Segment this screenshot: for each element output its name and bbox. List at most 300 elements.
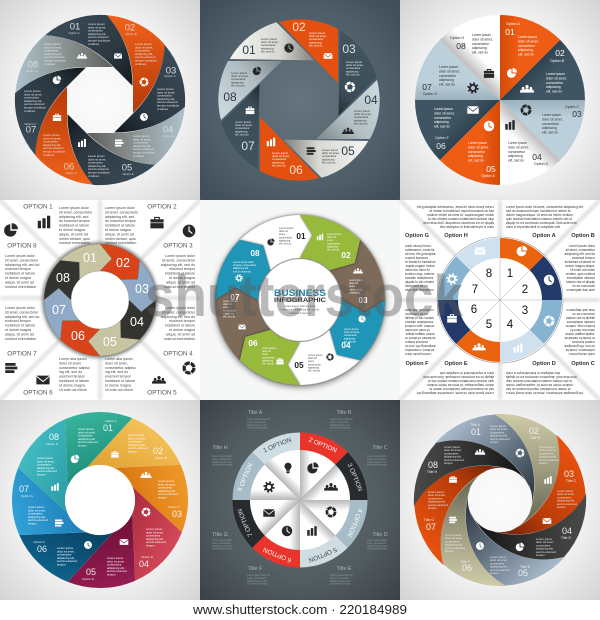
text 3: aliqua. Ut enim ad [166,280,195,284]
text 02: adipiscing elit, [135,52,153,56]
text C: Lorem ipsum [542,113,561,117]
text A: Lorem ipsum [518,35,537,39]
text B: dolor sit amet, [546,76,567,80]
panel: straight shutter ring on dark background [200,0,400,200]
numbers and option labels: Option H [450,36,464,40]
text 08: Lorem ipsum [44,42,61,46]
text 5: eiusmod tempor [105,375,132,379]
text H: adipiscing [472,46,487,50]
wedge H [440,0,542,100]
wedge 3 [300,452,381,534]
text 03: dolor sit amet, [346,63,364,67]
numbers: 02 [341,250,351,260]
numbers and option labels: Option D [534,162,548,166]
ring of eight straight blades [214,15,384,185]
text 5: et dolore magna [105,383,131,387]
option headings: OPTION 1 [23,204,53,210]
text 05: dolor sit [308,357,317,360]
left upper mirrored text: sit amet, consectetur [404,248,434,252]
ring option labels: 7 OPTION [236,507,254,538]
option headings: OPTION 8 [7,242,37,250]
numbers: 05 [294,360,304,370]
top right text: dolore magna aliqua. Ut enim ad minim veniam, [506,213,574,217]
panel: business infographic pentagon ring [197,197,403,403]
numbers and option labels: Option D [162,134,174,138]
numbers and titles: 08 [428,460,438,470]
text 02: dolor sit [327,236,336,239]
text 03: amet, [349,285,356,288]
text 05: consectetur [490,561,505,565]
text 05: adipiscing elit, [107,566,125,570]
text A: amet, consectetur [247,421,266,424]
title body text blocks [212,418,388,586]
text 03: adipiscing [346,69,359,73]
text 01: Lorem ipsum [78,427,94,431]
option headings: Option E [444,361,468,367]
text E: adipiscing [468,154,483,158]
blade 06 [260,117,319,181]
text 04: consectetur [354,115,369,119]
numbers: 05 [341,144,355,158]
text 01: adipiscing [279,239,291,242]
text 05: adipiscing [308,366,320,369]
wedge 1 [252,419,334,500]
blade 07 [214,84,301,171]
top right text: aliquip ex ea commodo consequat. Duis aute irure [506,221,577,225]
text 4: Lorem ipsum dolor [165,306,195,310]
right upper text: veniam, quis nostrud [566,272,595,276]
inner wedge 8 [265,440,325,500]
text 05: amet, [308,360,315,363]
text 6: incididunt ut labore [59,379,89,383]
text 04: elit, sed do [354,121,368,125]
arrow 02 [86,232,148,294]
text 04: Lorem ipsum [344,328,358,331]
text 2: et dolore magna [105,228,131,232]
numbers and option labels: 03 [166,66,176,76]
text 07: sed do eiusmod [24,102,45,106]
numbers and option labels: 02 [555,48,565,58]
text 01: Lorem ipsum [88,22,105,26]
text 08: consectetur [444,451,459,455]
text 03: tempor [158,496,167,500]
panel: arrow ring with option columns [0,200,200,400]
text C: amet, consectetur [367,458,386,461]
left lower rotated text: adipiscing elit, sed do [405,344,435,348]
option headings: OPTION 4 [163,350,193,358]
panel 4 background [0,200,200,400]
blade 08 [15,35,113,93]
text 04: consectetur [146,534,161,538]
icons [246,43,354,155]
text 06: tempor [445,549,454,553]
text A: do eiusmod tempor [247,427,268,430]
text 04: tempor incididunt [133,150,155,154]
wedge 7 [219,466,300,548]
text 1: adipiscing elit, sed [59,215,88,219]
text 08: consectetur [37,463,52,467]
text 02: tempor [539,461,548,465]
text G: consectetur [439,74,457,78]
text 05: adipiscing [322,157,335,161]
text 06: consectetur [445,539,460,543]
bottom right flipped text: dolor in reprehenderit in voluptate velit [506,371,560,375]
text 07: adipiscing elit, [24,99,42,103]
text 04: dolor sit amet, [133,137,151,141]
text 08: adipiscing elit, [37,466,55,470]
numbers: 03 [342,42,356,56]
text 05: sed do eiusmod [107,569,127,573]
titles: Title C [372,445,388,451]
text 8: incididunt ut labore [5,272,35,276]
text 03: adipiscing elit, [158,489,176,493]
text 08: dolor sit amet, [37,459,55,463]
text 06: Lorem ipsum [57,546,73,550]
text 08: sed do eiusmod [37,469,57,473]
arrow 03 [120,260,156,312]
text 06: consectetur [262,356,275,359]
text 03: tempor incididunt [157,104,179,108]
blade 04 [316,80,380,139]
text 7: et dolore magna [5,328,31,332]
wedge E [456,330,500,362]
text 06: adipiscing [272,160,285,164]
text 07: sed do eiusmod [428,503,448,507]
numbers and option labels: Option E [481,174,496,178]
text 03: sed do eiusmod [557,502,577,506]
text 05: elit, sed do [308,370,321,372]
text 4: adipiscing elit, sed do [161,315,195,319]
inner numbers: 2 [522,284,528,296]
text 7: nostrud exercitation [5,337,36,341]
text H: Lorem ipsum [472,33,491,37]
numbers: 06 [248,338,258,348]
left upper mirrored text: laboris nisi ut aliquip [405,280,434,284]
text 2: minim veniam, quis [105,237,136,241]
numbers: 04 [341,340,351,350]
text 4: aliqua. Ut enim ad [166,332,195,336]
panel 2 background [200,0,400,200]
text 07: dolor sit amet, [24,92,42,96]
bottom left rotated text: aliquip ex ea commodo consequat. Duis aute irure [423,375,494,379]
text 04: adipiscing elit, [536,547,554,551]
text 8: eiusmod tempor [5,267,32,271]
left upper mirrored text: consequat duis aute [405,288,434,292]
text 07: adipiscing [235,129,248,133]
numbers: 03 [358,295,368,305]
numbers and option labels: Option B [155,456,167,460]
wedge 2 [300,432,348,500]
text 04: dolor sit amet, [536,540,554,544]
panel: spiral ring with eight titles [397,397,600,603]
text 3: eiusmod tempor [169,267,196,271]
text G: amet, consectetur [212,542,231,545]
text 03: adipiscing [349,291,361,294]
text 04: tempor [536,553,545,557]
panel 1 background [0,0,200,200]
body text blocks [28,427,178,576]
panel 7 background [0,400,200,600]
ring option labels: 8 OPTION [237,462,255,493]
blade 05 [437,475,565,603]
numbers and option labels: 04 [163,124,173,136]
text 01: dolor sit amet, [261,40,279,44]
ring numbers: 04 [130,315,144,329]
ring numbers [52,251,149,349]
numbers: 07 [230,292,240,302]
text 6: et dolore magna [59,383,85,387]
option headings: Option C [571,361,595,367]
text 01: consectetur [88,29,103,33]
text 3: nostrud exercitation [164,285,195,289]
inner wedge 4 [275,500,335,560]
text 03: Lorem ipsum [158,479,174,483]
icons [4,216,195,384]
text C: consectetur [542,122,560,126]
wedge D [490,321,544,375]
text 07: adipiscing elit, [28,515,46,519]
numbers and option labels [19,419,182,581]
blade 08 [414,440,529,506]
watermark: shutterstock [145,264,464,329]
text E: Lorem ipsum dolor sit [330,574,353,577]
wedge D [458,100,560,203]
numbers and option labels: 03 [172,509,182,519]
text D: adipiscing elit, sed [367,545,387,548]
text 6: Ut enim ad minim [59,388,87,392]
text 02: ut labore [135,62,147,66]
numbers and titles: 03 [564,469,574,479]
right upper text: sit amet, consectetur [566,248,596,252]
text 04: adipiscing elit, [133,144,151,148]
text 07: consectetur [24,96,39,100]
left upper mirrored text: incididunt ut labore et [405,260,435,264]
text 08: sed do eiusmod [44,55,65,59]
numbers and titles: Title E [520,565,531,569]
text 06: tempor [57,562,66,566]
text H: amet, consectetur [212,458,231,461]
text C: dolor sit amet, [542,117,563,121]
ring option labels: 2 OPTION [307,437,338,455]
bottom left rotated text: quis nostrud exercitation ullamco laboris nisi ut [428,379,494,383]
numbers and option labels: Option F [65,171,77,175]
ring option labels: 6 OPTION [262,545,293,563]
numbers and option labels: Option H [26,69,38,73]
left lower rotated text: Lorem ipsum dolor [405,352,431,356]
numbers: 02 [292,20,306,34]
center small text: Lorem ipsum dolor sit amet, [284,304,316,308]
text G: dolor sit amet, [439,69,460,73]
arrow 01 [60,244,112,280]
numbers and option labels: 01 [70,22,80,32]
text 01: elit, sed do [279,242,292,246]
text 07: ut labore [24,109,36,113]
text F: consectetur [434,116,452,120]
text 03: consectetur [346,66,361,70]
text 05: consectetur [322,154,337,158]
text 03: consectetur [557,495,572,499]
wedge A [500,238,544,270]
text B: consectetur [546,81,564,85]
text 07: tempor incididunt [24,106,46,110]
titles: Title E [336,566,352,572]
text G: adipiscing elit, sed [212,545,232,548]
numbers and titles: 06 [462,563,472,573]
text 08: ut labore [44,62,56,66]
text 02: Lorem ipsum [309,31,325,35]
segment 02 [300,215,360,270]
text 06: amet, [262,353,269,356]
option headings: OPTION 3 [163,242,193,250]
text 4: nostrud exercitation [164,337,195,341]
left lower rotated text: incididunt ut labore et [405,336,435,340]
ring option labels: 3 OPTION [346,462,364,493]
bottom left rotated text: dolor in reprehenderit in voluptate velit [440,371,494,375]
text 6: eiusmod tempor [59,375,86,379]
inner numbers: 5 [486,319,492,331]
ring drop shadow [214,216,386,388]
text 8: et dolore magna [5,276,31,280]
text D: adipiscing [508,154,523,158]
center small text: consectetur adipiscing elit, sed do [281,308,320,312]
text 08: sed do eiusmod [233,270,251,273]
text 07: elit, sed do [235,132,249,136]
ring option labels [236,436,364,564]
right upper text: Lorem ipsum dolor [569,244,595,248]
text 07: consectetur [223,309,236,312]
text D: dolor sit amet, [508,145,529,149]
center title: BUSINESS [274,288,326,298]
top left mirrored text: dolor in reprehenderit in voluptate velit [440,225,494,229]
outer ring wedges [219,419,381,581]
text 4: eiusmod tempor [169,319,196,323]
text 08: dolor sit amet, [44,45,62,49]
text C: Lorem ipsum dolor [367,455,387,458]
numbers and option labels: 02 [125,22,135,34]
text 06: dolor sit [262,350,271,353]
wedge C [500,100,585,160]
panel: pie chart with eight options [397,0,600,203]
text 04: tempor [146,544,155,548]
left upper mirrored text: dolore magna aliqua. [405,264,435,268]
titles [212,410,388,572]
numbers and option labels: Option C [168,505,181,509]
right lower flipped text: eiusmod tempor [572,340,596,344]
text E: dolor sit amet, [468,145,489,149]
text 7: incididunt ut labore [5,324,35,328]
text 01: adipiscing elit, [78,437,96,441]
text 5: dolor sit amet, [105,361,128,365]
blade 04 [132,487,182,581]
blade 03 [475,435,600,563]
text F: elit, sed do [434,125,450,129]
text 06: dolor sit amet, [272,154,290,158]
inner numbers [471,268,528,331]
paper fold shadows [400,200,600,400]
text 04: adipiscing [354,118,367,122]
numbers: 07 [241,139,255,153]
top left mirrored text: sed do eiusmod tempor incididunt ut labore et [429,209,494,213]
top left mirrored text: quis nostrud exercitation ullamco laboris nisi ut [428,217,494,221]
text 04: Lorem ipsum [536,537,552,541]
text 01: tempor [490,440,499,444]
text 2: sit amet, consectetur [105,210,139,214]
inner wedge 2 [300,465,360,525]
segment 01 [240,197,321,279]
ring of eight spiral blades [397,397,600,603]
left lower rotated text: veniam, quis nostrud [405,324,434,328]
text 3: adipiscing elit, sed do [161,263,195,267]
wedge C [530,300,562,344]
text 02: dolor sit amet, [309,34,327,38]
text 02: consectetur [539,451,554,455]
bottom right flipped text: dolore magna aliqua. Ut enim ad minim veniam, [506,383,574,387]
text 08: Lorem ipsum dolor [233,261,254,264]
inner icons [263,462,338,536]
numbers and option labels: 05 [486,164,496,174]
center circle [259,259,341,341]
text 08: dolor sit amet, [231,74,249,78]
text 03: Lorem ipsum [346,60,362,64]
text 01: Lorem ipsum [279,227,293,230]
text 06: consectetur [272,157,287,161]
text 07: amet, [223,306,230,309]
titles: Title F [248,566,263,572]
text 04: Lorem ipsum [354,109,370,113]
blade 02 [107,15,165,113]
text 07: Lorem ipsum [24,89,41,93]
text 03: adipiscing elit, [557,499,575,503]
text 08: consectetur [44,49,59,53]
text 8: aliqua. Ut enim ad [5,280,34,284]
blade 01 [45,0,155,104]
text 04: Lorem ipsum [146,527,162,531]
text 05: dolor sit amet, [88,157,106,161]
blade 08 [218,61,282,120]
text 07: dolor sit amet, [428,493,446,497]
text 5: ing elit, sed do [105,370,128,374]
right upper text: eiusmod tempor [572,256,596,260]
blade 04 [471,494,586,560]
text E: adipiscing elit, sed [330,580,350,583]
text 3: et dolore magna [169,276,195,280]
numbers and titles: Title G [424,518,434,522]
left lower rotated text: eiusmod tempor [404,340,428,344]
left upper mirrored text: veniam, quis nostrud [405,272,434,276]
text B: Lorem ipsum dolor sit [330,418,353,421]
text 07: consectetur [428,496,443,500]
panel 6 background [400,200,600,400]
text 4: et dolore magna [169,328,195,332]
text 05: Lorem ipsum [308,354,322,357]
text 05: tempor incididunt [88,170,110,174]
text 6: ing elit, sed do [59,370,82,374]
text 08: Lorem ipsum [444,445,460,449]
option headings: Option B [571,233,595,239]
text 02: dolor sit amet, [135,45,153,49]
numbers and option labels: 01 [103,423,113,433]
wedge B [500,40,600,142]
text C: elit, sed do [542,131,558,135]
text 02: amet, [327,239,334,242]
text 08: tempor incididunt [44,58,66,62]
bottom right flipped text: sed do eiusmod tempor incididunt ut labore et [506,387,571,391]
numbers and option labels: Option C [164,74,176,78]
text 01: sed do eiusmod [490,437,510,441]
text 2: Lorem ipsum dolor [105,206,135,210]
text C: adipiscing elit, sed [367,461,387,464]
text 05: Lorem ipsum [490,555,506,559]
